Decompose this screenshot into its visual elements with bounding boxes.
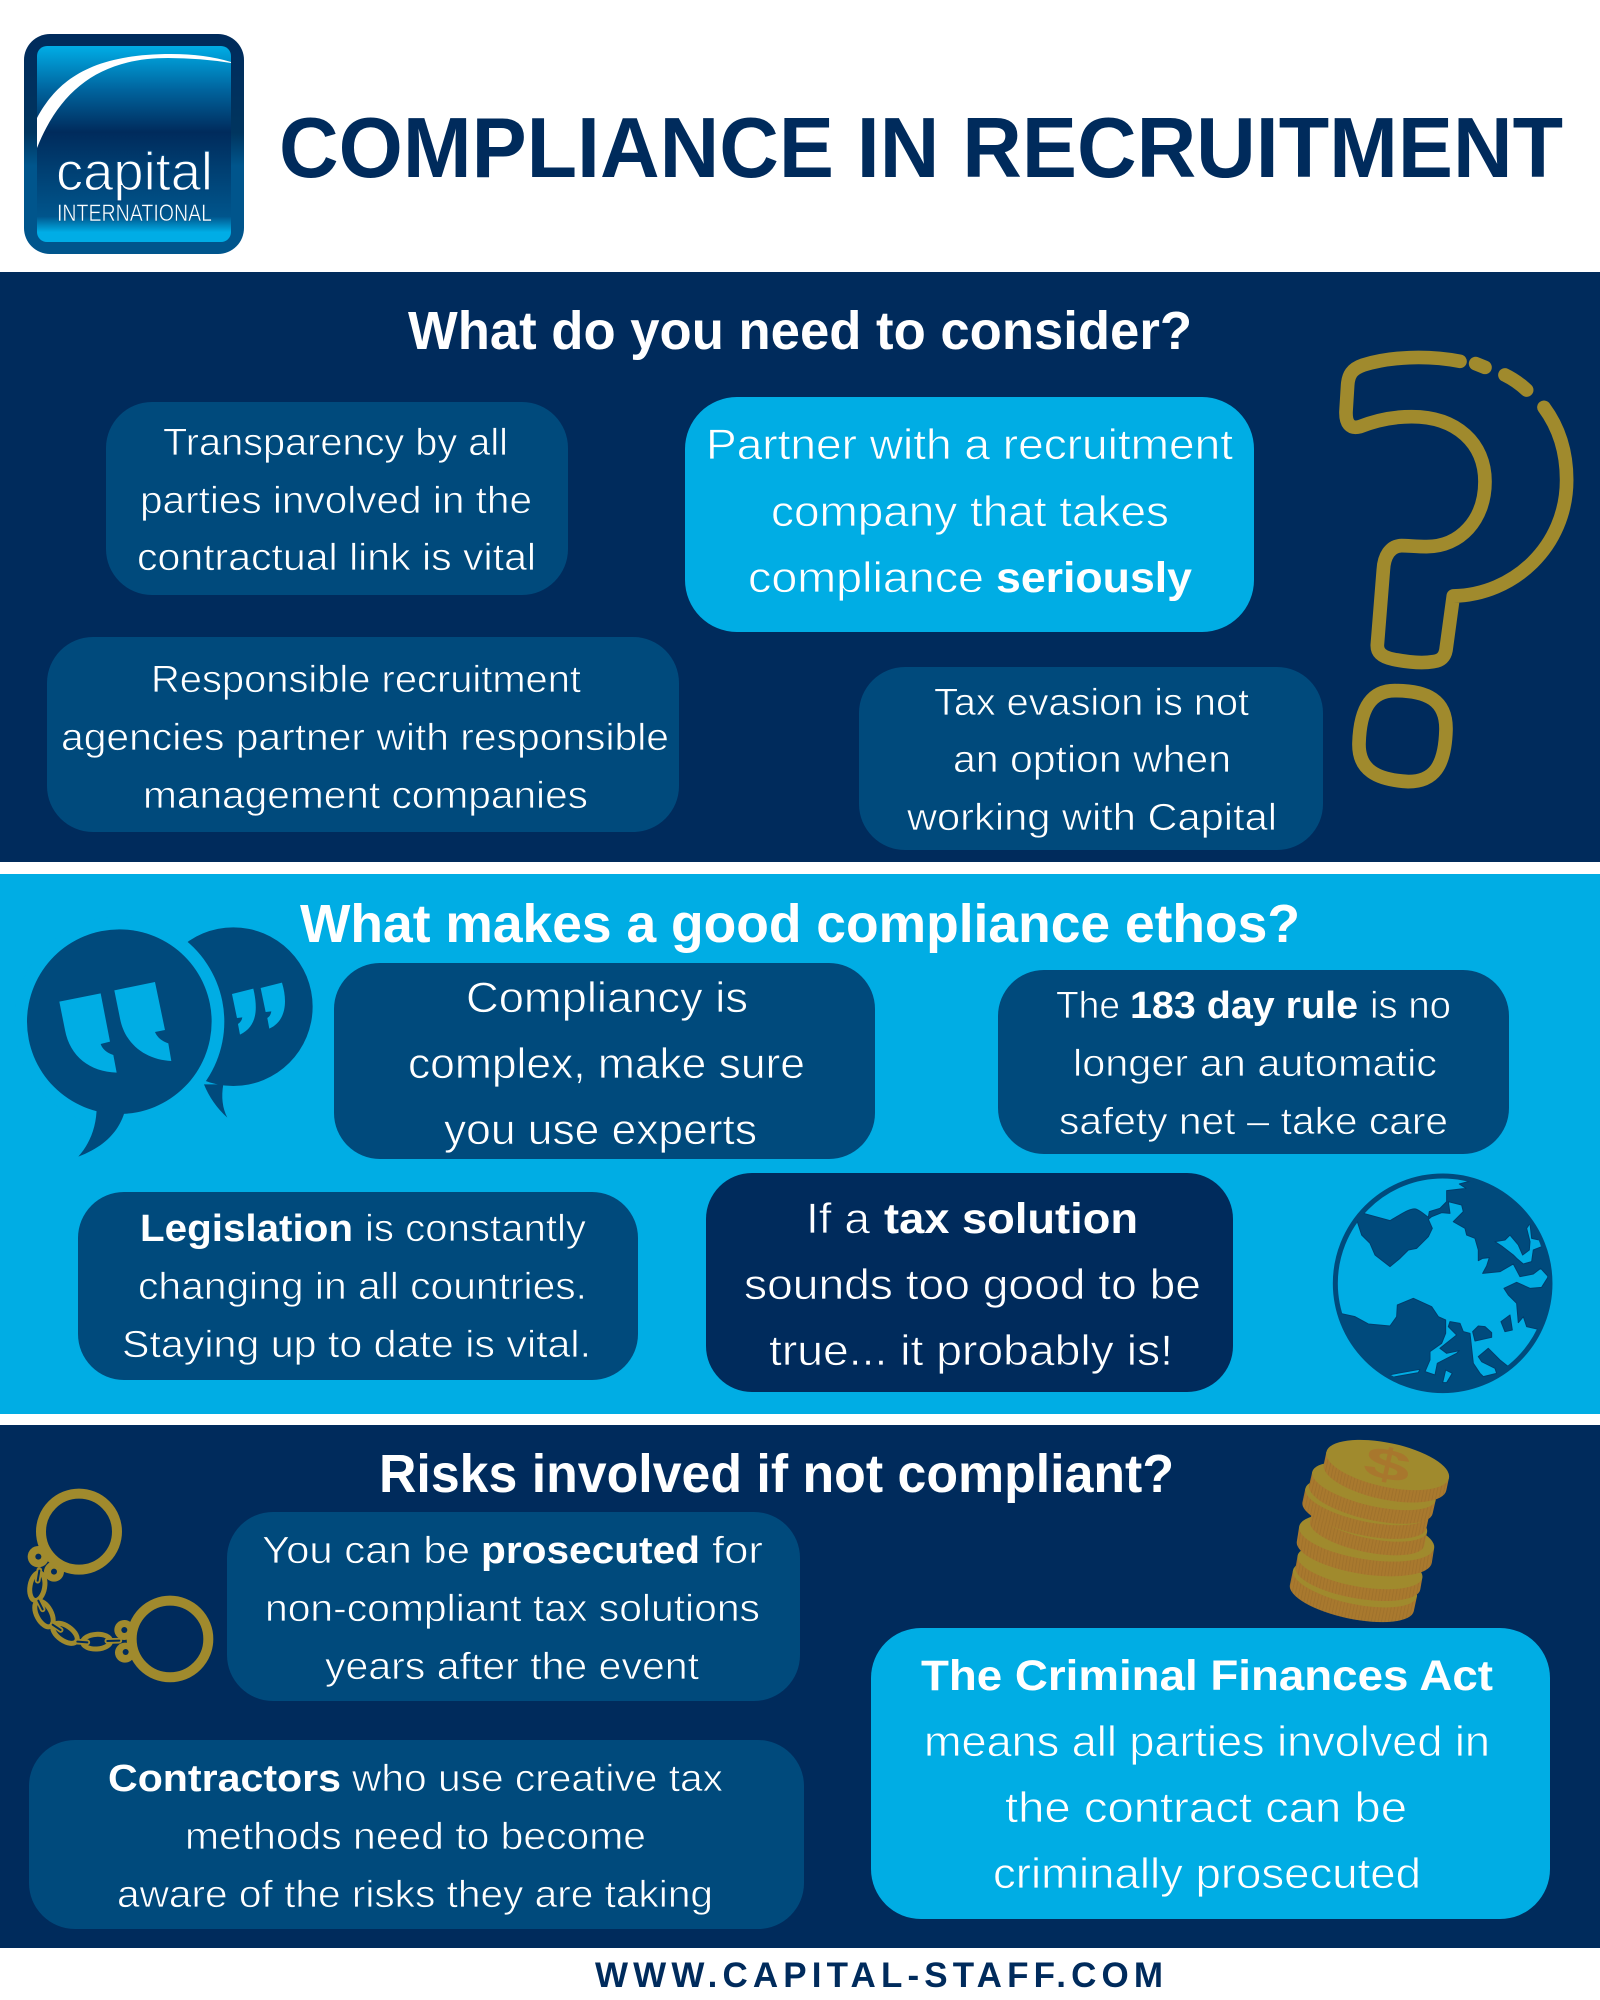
callout: tax evasion: working with Capital bbox=[906, 797, 1277, 839]
panel: risks involved if not compliant bbox=[0, 1425, 1600, 1948]
callout: you can be prosecuted: prosecuted bbox=[481, 1530, 700, 1572]
icon: stack of coins: $ bbox=[1359, 1437, 1415, 1494]
icon: question mark bbox=[1346, 357, 1567, 782]
icon: handcuffs bbox=[28, 1494, 208, 1677]
callout: tax solution: tax solution bbox=[884, 1195, 1138, 1243]
callout: transparency: parties involved in the bbox=[140, 480, 532, 522]
callout: tax solution: sounds too good to be bbox=[744, 1261, 1201, 1309]
callout: 183 day rule: is no bbox=[1370, 985, 1451, 1027]
callout: contractors: Contractors bbox=[108, 1758, 341, 1800]
callout: transparency bbox=[106, 402, 568, 595]
callout: tax solution: true... it probably is! bbox=[769, 1327, 1173, 1375]
callout: legislation: Staying up to date is vital. bbox=[122, 1324, 591, 1366]
callout: transparency: Transparency by all bbox=[163, 422, 508, 464]
callout: partner with a recruitment company: compliance bbox=[748, 554, 984, 602]
callout: you can be prosecuted: for bbox=[712, 1530, 763, 1572]
callout: 183 day rule bbox=[998, 970, 1509, 1154]
callout: compliancy is complex: you use experts bbox=[444, 1106, 757, 1154]
callout: contractors: who use creative tax bbox=[351, 1758, 723, 1800]
panel: what do you need to consider bbox=[0, 272, 1600, 862]
callout: you can be prosecuted bbox=[227, 1512, 800, 1701]
callout: compliancy is complex: Compliancy is bbox=[466, 974, 748, 1022]
footer: website address: WWW.CAPITAL-STAFF.COM bbox=[595, 1956, 1163, 1995]
icon: globe bbox=[1332, 1174, 1552, 1394]
callout: criminal finances act: The Criminal Finances Act bbox=[921, 1652, 1493, 1700]
callout: legislation: is constantly bbox=[365, 1208, 586, 1250]
callout: contractors: methods need to become bbox=[185, 1816, 646, 1858]
callout: tax solution bbox=[706, 1173, 1233, 1392]
callout: criminal finances act: criminally prosecuted bbox=[993, 1850, 1421, 1898]
callout: tax solution: If a bbox=[806, 1195, 870, 1243]
callout: responsible recruitment agencies: management companies bbox=[143, 775, 588, 817]
callout: partner with a recruitment company bbox=[685, 397, 1254, 632]
callout: criminal finances act: means all parties involved in bbox=[924, 1718, 1490, 1766]
heading: what makes a good compliance ethos: What makes a good compliance ethos? bbox=[300, 894, 1300, 954]
callout: tax evasion bbox=[859, 667, 1323, 850]
heading: what do you need to consider: What do you need to consider? bbox=[408, 301, 1192, 361]
callout: partner with a recruitment company: seriously bbox=[996, 554, 1192, 602]
logo: Capital International: capital bbox=[56, 142, 213, 202]
icon: speech bubbles with quotes bbox=[14, 917, 313, 1157]
callout: compliancy is complex: complex, make sure bbox=[408, 1040, 805, 1088]
title: COMPLIANCE IN RECRUITMENT bbox=[279, 101, 1563, 196]
callout: compliancy is complex bbox=[334, 963, 875, 1159]
callout: you can be prosecuted: non-compliant tax solutions bbox=[265, 1588, 760, 1630]
callout: 183 day rule: The bbox=[1056, 985, 1120, 1027]
callout: you can be prosecuted: You can be bbox=[262, 1530, 470, 1572]
callout: criminal finances act bbox=[871, 1628, 1550, 1919]
callout: 183 day rule: longer an automatic bbox=[1073, 1043, 1437, 1085]
callout: 183 day rule: 183 day rule bbox=[1130, 985, 1358, 1027]
callout: partner with a recruitment company: company that takes bbox=[771, 488, 1169, 536]
callout: 183 day rule: safety net – take care bbox=[1059, 1101, 1448, 1143]
callout: responsible recruitment agencies: agencies partner with responsible bbox=[61, 717, 669, 759]
callout: legislation bbox=[78, 1192, 638, 1380]
callout: legislation: changing in all countries. bbox=[138, 1266, 587, 1308]
icon: stack of coins bbox=[1286, 1430, 1454, 1631]
heading: risks involved if not compliant: Risks involved if not compliant? bbox=[379, 1444, 1174, 1504]
logo: Capital International: INTERNATIONAL bbox=[57, 200, 212, 227]
callout: contractors: aware of the risks they are taking bbox=[117, 1874, 713, 1916]
callout: partner with a recruitment company: Partner with a recruitment bbox=[706, 421, 1233, 469]
callout: you can be prosecuted: years after the event bbox=[325, 1646, 699, 1688]
callout: legislation: Legislation bbox=[140, 1208, 353, 1250]
callout: transparency: contractual link is vital bbox=[137, 537, 536, 579]
callout: responsible recruitment agencies bbox=[47, 637, 679, 832]
callout: criminal finances act: the contract can be bbox=[1005, 1784, 1407, 1832]
callout: tax evasion: an option when bbox=[953, 739, 1231, 781]
logo: Capital International bbox=[24, 34, 244, 254]
callout: contractors bbox=[29, 1740, 804, 1929]
callout: tax evasion: Tax evasion is not bbox=[934, 682, 1249, 724]
callout: responsible recruitment agencies: Responsible recruitment bbox=[151, 659, 581, 701]
panel: what makes a good compliance ethos bbox=[0, 874, 1600, 1414]
